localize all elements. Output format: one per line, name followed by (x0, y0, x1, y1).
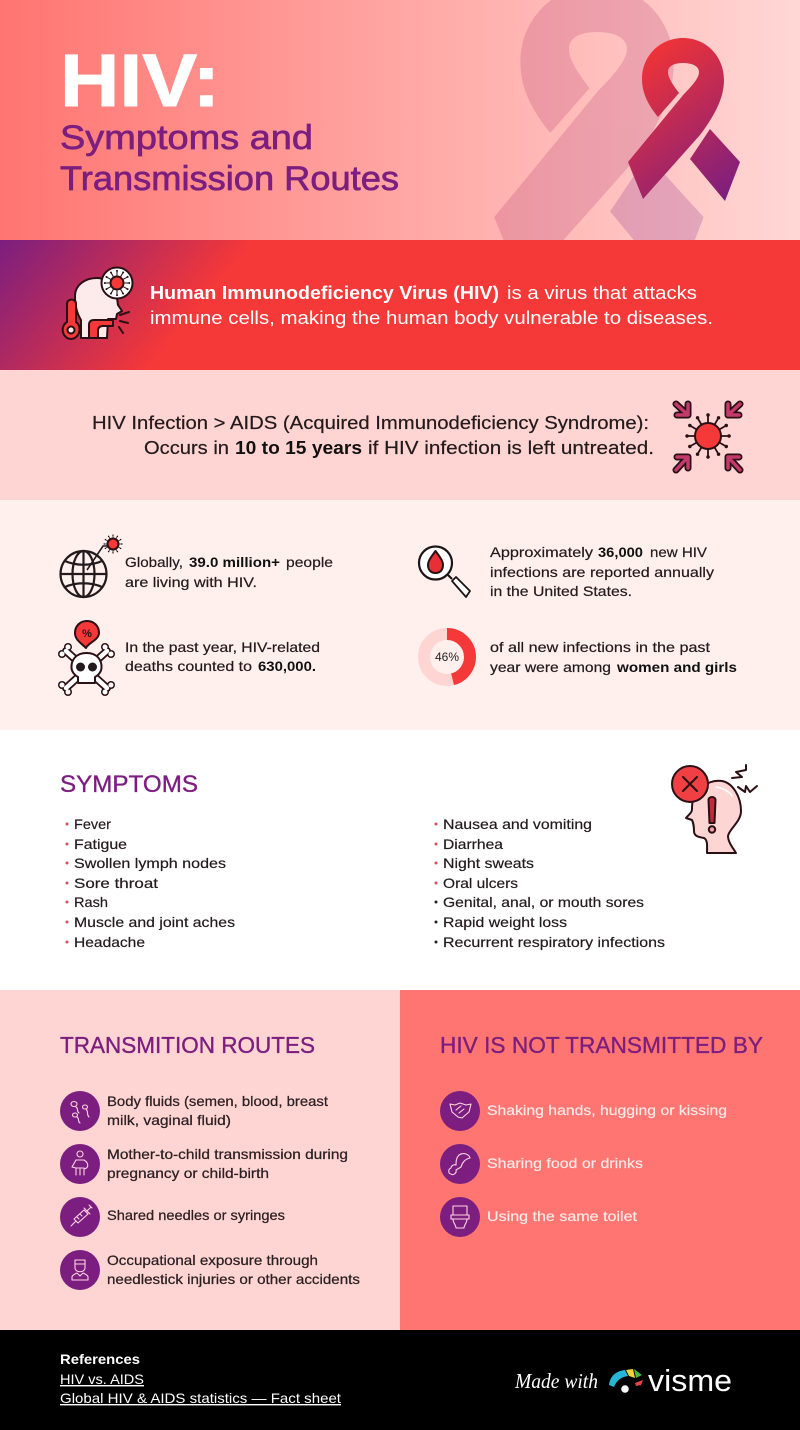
icon: skull and crossbones: % (82, 628, 92, 640)
icon: skull and crossbones (58, 621, 115, 696)
title (60, 39, 399, 198)
list: symptoms right: Rapid weight loss (443, 914, 567, 930)
text: references: HIV vs. AIDS (60, 1371, 144, 1387)
list: symptoms right: Diarrhea (443, 836, 503, 852)
route: occupational: Occupational exposure through (107, 1252, 318, 1268)
icon: head with warning (672, 765, 757, 853)
text: US infections: in the United States. (490, 583, 632, 599)
icon: virus with inward arrows (676, 404, 740, 470)
item: toilet: Using the same toilet (487, 1208, 637, 1224)
text: US infections (490, 544, 714, 599)
route: mother to child (60, 1144, 348, 1184)
panel: header (0, 0, 800, 290)
text: progression (92, 413, 654, 458)
icon: blood drop magnifier (419, 546, 470, 597)
text: definition: is a virus that attacks (507, 283, 697, 303)
list: symptoms right: Nausea and vomiting (443, 816, 592, 832)
panel: AIDS progression (0, 370, 800, 500)
list: symptoms right: Genital, anal, or mouth sores (443, 894, 644, 910)
logo: made with visme: visme (648, 1363, 732, 1398)
chart: 46% donut (424, 634, 470, 680)
route: body fluids: Body fluids (semen, blood, breast (107, 1093, 328, 1109)
route: occupational (60, 1250, 360, 1290)
list: symptoms right: Oral ulcers (443, 875, 518, 891)
text: US infections: new HIV (650, 544, 708, 560)
text: global count: 39.0 million+ (189, 554, 280, 570)
route: body fluids (60, 1091, 328, 1131)
text: progression: HIV Infection > AIDS (Acquired Immunodeficiency Syndrome): (92, 413, 649, 433)
route: body fluids: milk, vaginal fluid) (107, 1112, 231, 1128)
heading: symptoms: SYMPTOMS (60, 771, 198, 798)
text: women and girls (490, 639, 737, 675)
item: toilet (440, 1197, 637, 1237)
icon: large faded ribbon (494, 0, 704, 290)
title: Symptoms and (60, 119, 313, 157)
list: symptoms left: Headache (74, 934, 145, 950)
text: definition: Human Immunodeficiency Virus (HIV) (150, 283, 499, 303)
list: symptoms left: Swollen lymph nodes (74, 855, 226, 871)
heading: not transmitted by: HIV IS NOT TRANSMITTED BY (440, 1032, 763, 1058)
text: definition (150, 283, 713, 328)
logo: made with visme: Made with (514, 1369, 598, 1393)
text: women and girls: of all new infections in the past (490, 639, 710, 655)
panel: statistics (0, 500, 800, 730)
title: Transmission Routes (60, 160, 399, 198)
text: progression: Occurs in (144, 438, 229, 458)
text: deaths (125, 639, 320, 674)
route: needles (60, 1197, 285, 1237)
chart: 46% donut: 46% (435, 650, 459, 664)
item: shaking hands: Shaking hands, hugging or kissing (487, 1102, 727, 1118)
icon: globe with virus (60, 535, 122, 597)
text: deaths: deaths counted to (125, 658, 252, 674)
panel: symptoms (0, 730, 800, 990)
text: deaths: In the past year, HIV-related (125, 639, 320, 655)
text: global count: are living with HIV. (125, 574, 257, 590)
text: women and girls: year were among (490, 659, 611, 675)
text: women and girls: women and girls (616, 659, 737, 675)
list: symptoms left: Rash (74, 894, 108, 910)
text: global count: Globally, (125, 554, 183, 570)
list: symptoms left: Sore throat (74, 875, 158, 891)
heading: transmission routes: TRANSMITION ROUTES (60, 1032, 315, 1058)
route: mother to child: Mother-to-child transmission during (107, 1146, 348, 1162)
text: global count: people (286, 554, 333, 570)
text: US infections: infections are reported annually (490, 564, 714, 580)
text: references: References (60, 1351, 140, 1367)
route: mother to child: pregnancy or child-birth (107, 1165, 269, 1181)
list: symptoms left: Muscle and joint aches (74, 914, 235, 930)
text: progression: if HIV infection is left untreated. (368, 438, 654, 458)
item: food or drinks (440, 1144, 643, 1184)
panel: transmission routes (0, 990, 400, 1330)
list: symptoms right: Night sweats (443, 855, 534, 871)
text: progression: 10 to 15 years (235, 438, 362, 458)
logo: made with visme (514, 1363, 732, 1398)
route: occupational: needlestick injuries or other accidents (107, 1271, 360, 1287)
panel: footer (0, 1330, 800, 1430)
route: needles: Shared needles or syringes (107, 1207, 285, 1223)
item: shaking hands (440, 1091, 727, 1131)
list: symptoms left: Fatigue (74, 836, 127, 852)
text: deaths: 630,000. (258, 658, 316, 674)
title: HIV: (60, 39, 220, 122)
item: food or drinks: Sharing food or drinks (487, 1155, 643, 1171)
text: references: Global HIV & AIDS statistics — Fact sheet (60, 1390, 341, 1406)
text: definition: immune cells, making the human body vulnerable to diseases. (150, 308, 713, 328)
icon: red ribbon (628, 38, 740, 201)
text: references (60, 1351, 341, 1406)
panel: definition band (0, 240, 800, 370)
list: symptoms right (434, 816, 665, 950)
text: global count (125, 554, 333, 590)
icon: sick head with thermometer (63, 268, 132, 339)
text: US infections: 36,000 (598, 544, 643, 560)
list: symptoms left: Fever (74, 816, 111, 832)
list: symptoms left (66, 816, 235, 950)
panel: not transmitted by (400, 990, 800, 1330)
text: US infections: Approximately (490, 544, 593, 560)
list: symptoms right: Recurrent respiratory infections (443, 934, 665, 950)
